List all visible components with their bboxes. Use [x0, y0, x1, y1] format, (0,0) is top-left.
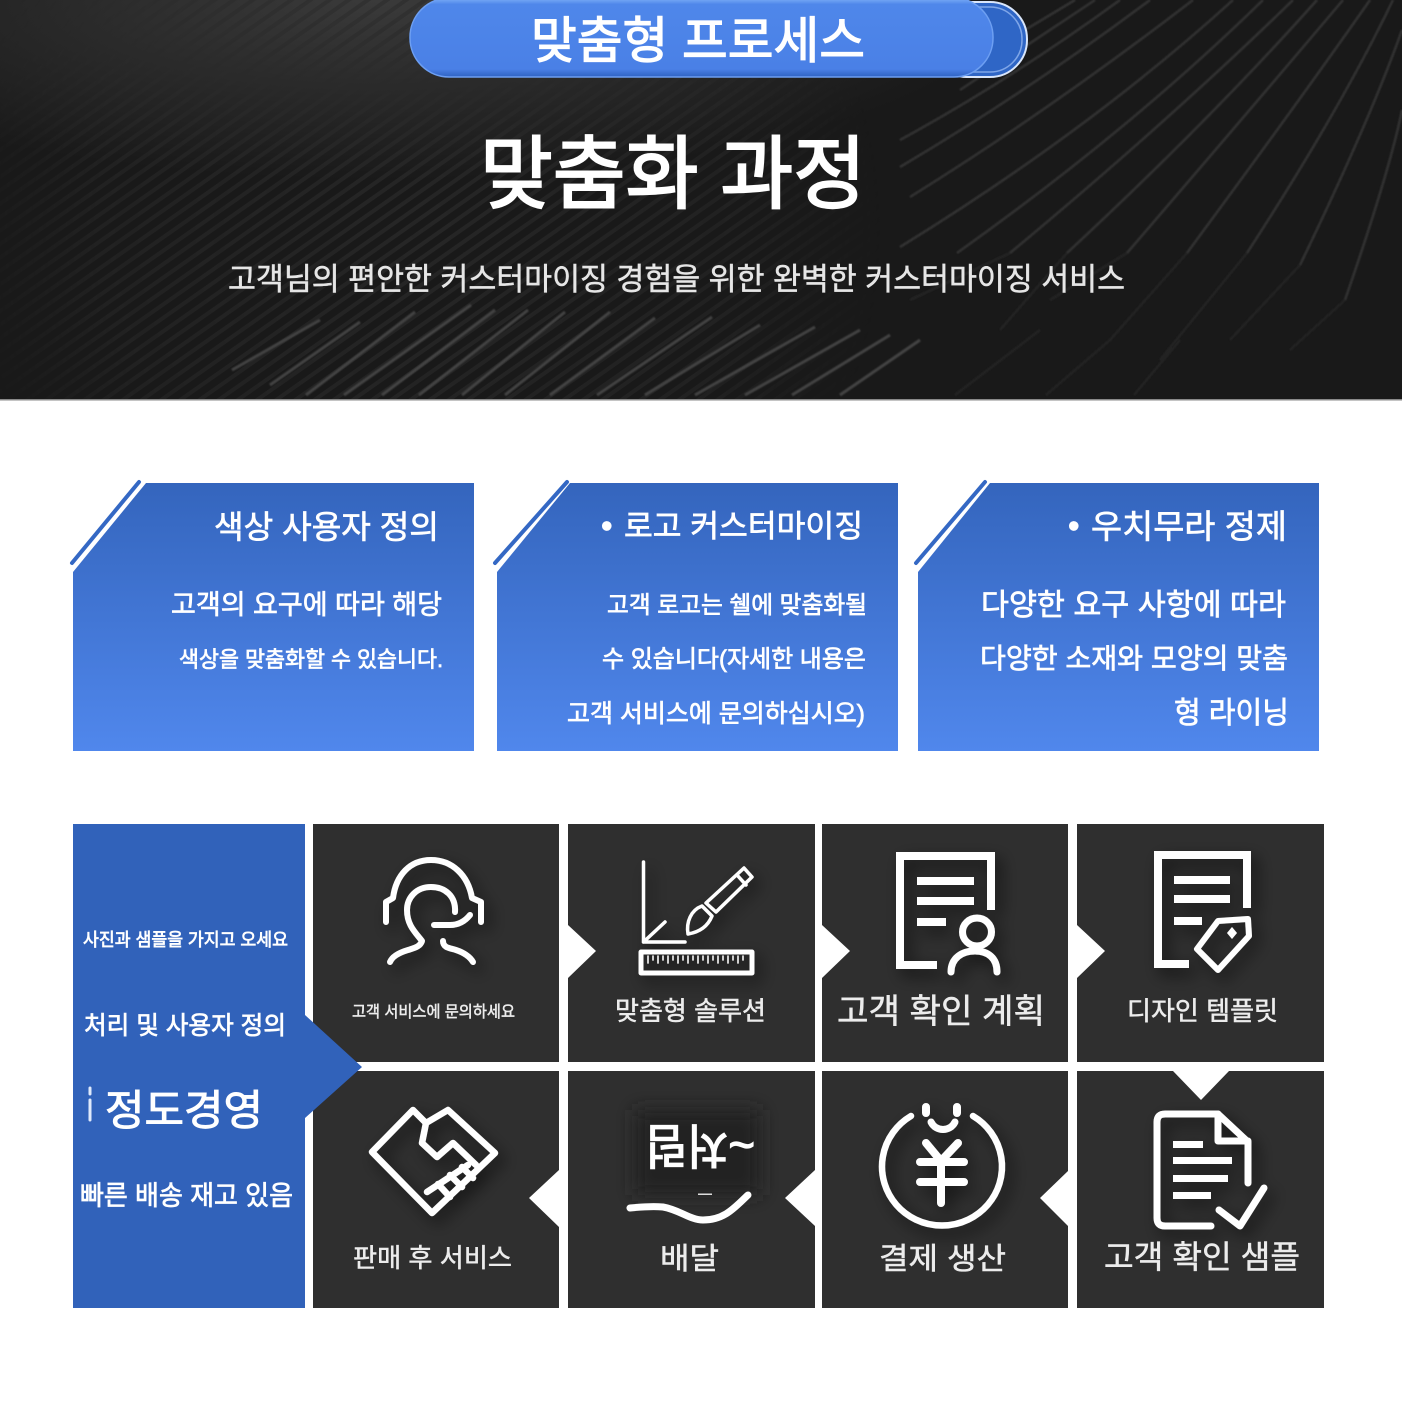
panel: left summary column: 사진과 샘플을 가지고 오세요 — [83, 930, 288, 950]
panel: header banner — [0, 0, 1402, 400]
panel: process tile delivery — [568, 1071, 815, 1308]
arrow: right — [1077, 925, 1105, 978]
panel: process tile custom solution: 맞춤형 솔루션 — [615, 996, 766, 1026]
panel: process tile confirm sample — [1077, 1071, 1324, 1308]
panel: lining refinement card: 우치무라 정제 — [1091, 508, 1287, 545]
icon: customer service headset — [386, 860, 481, 962]
panel: color customization card — [72, 482, 474, 751]
panel: process tile after-sales — [313, 1071, 559, 1308]
arrow: left — [785, 1170, 815, 1226]
panel: left summary column: 처리 및 사용자 정의 — [84, 1012, 286, 1040]
panel: process tile payment: 결제 생산 — [879, 1243, 1006, 1276]
panel: process tile confirm plan: 고객 확인 계획 — [837, 993, 1045, 1031]
panel: lining refinement card — [916, 482, 1319, 751]
arrow: right — [568, 925, 596, 978]
panel: process tile payment — [822, 1071, 1068, 1308]
panel: process tile design template — [1077, 824, 1324, 1062]
icon: document with person — [900, 856, 997, 972]
panel: logo customization card: 로고 커스터마이징 — [624, 509, 863, 544]
panel: lining refinement card: 다양한 소재와 모양의 맞춤 — [980, 643, 1288, 674]
panel: process tile delivery: 배달 — [660, 1243, 719, 1276]
panel: process tile custom solution — [568, 824, 815, 1062]
panel: process tile headset: 고객 서비스에 문의하세요 — [352, 1003, 515, 1021]
panel: process tile headset — [313, 824, 559, 1062]
panel: lining refinement card: 형 라이닝 — [1174, 697, 1289, 730]
panel: process tile design template: 디자인 템플릿 — [1127, 996, 1278, 1026]
panel: process tile confirm sample: 고객 확인 샘플 — [1104, 1239, 1300, 1275]
icon: handshake — [372, 1110, 495, 1213]
panel: color customization card: 고객의 요구에 따라 해당 — [171, 590, 442, 620]
panel: lining refinement card: • — [1068, 507, 1080, 544]
panel: lining refinement card: 다양한 요구 사항에 따라 — [981, 589, 1286, 622]
icon: document with tag — [1158, 855, 1249, 970]
panel: left summary column: 빠른 배송 재고 있음 — [80, 1181, 293, 1211]
subtitle: 고객님의 편안한 커스터마이징 경험을 위한 완벽한 커스터마이징 서비스 — [228, 262, 1125, 297]
pill: process badge — [410, 0, 1027, 77]
panel: left summary column: 정도경영 — [105, 1087, 263, 1134]
icon: ruler and brush — [641, 862, 752, 973]
icon: yen circle — [882, 1107, 1002, 1226]
icon: delivery hand with inverted text — [630, 1110, 760, 1220]
panel: color customization card: 색상을 맞춤화할 수 있습니다. — [179, 647, 443, 672]
arrow: down — [1173, 1071, 1229, 1100]
icon: delivery hand with inverted text: ~처럼 — [645, 1118, 755, 1171]
panel: process tile confirm plan — [822, 824, 1068, 1062]
panel: left summary column — [73, 824, 362, 1308]
panel: logo customization card: 고객 서비스에 문의하십시오) — [567, 700, 865, 728]
arrow: left — [529, 1170, 559, 1227]
panel: logo customization card: • — [601, 507, 613, 544]
arrow: right — [822, 925, 850, 978]
panel: process tile after-sales: 판매 후 서비스 — [353, 1243, 512, 1273]
icon: document with check — [1157, 1114, 1264, 1226]
panel: color customization card: 색상 사용자 정의 — [214, 509, 439, 545]
pill: process badge: 맞춤형 프로세스 — [531, 13, 865, 69]
panel: logo customization card: 수 있습니다(자세한 내용은 — [602, 646, 866, 673]
panel: logo customization card — [495, 482, 898, 751]
arrow: left — [1040, 1171, 1068, 1226]
title: 맞춤화 과정 — [480, 130, 866, 219]
panel: logo customization card: 고객 로고는 쉘에 맞춤화될 — [607, 592, 867, 619]
